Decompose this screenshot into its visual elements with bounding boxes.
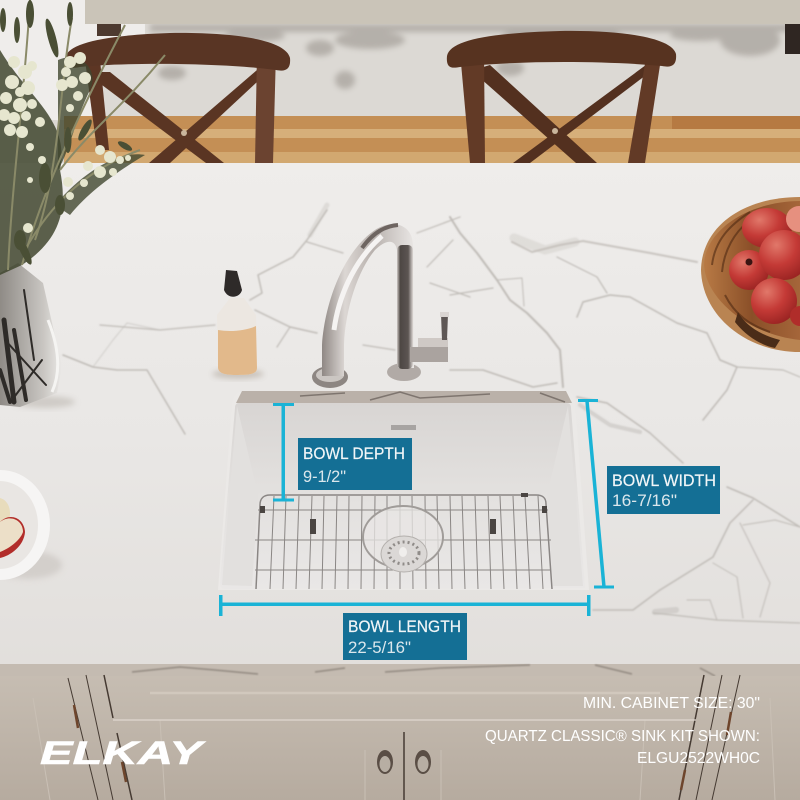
label: bowl depth — [298, 438, 412, 490]
plant flowers — [0, 52, 131, 233]
label: bowl length: BOWL LENGTH — [348, 617, 461, 636]
logo: Elkay: ELKAY — [40, 735, 206, 771]
dimension line: bowl width — [578, 400, 614, 587]
text: sink kit model — [485, 728, 760, 767]
dimension line: bowl length — [219, 595, 590, 616]
plant and glass vase — [0, 0, 165, 407]
icon: rack feet — [260, 493, 547, 534]
text: sink kit model: ELGU2522WH0C — [637, 750, 760, 767]
label: bowl depth: 9-1/2" — [303, 467, 346, 486]
chair: left — [65, 33, 290, 163]
plant stems — [8, 0, 165, 270]
label: bowl depth: BOWL DEPTH — [303, 444, 405, 463]
label: bowl width: BOWL WIDTH — [612, 471, 716, 490]
dimension line: bowl depth — [273, 403, 294, 502]
text: minimum cabinet size: MIN. CABINET SIZE: 30" — [583, 695, 760, 712]
icon: drain strainer — [363, 506, 443, 572]
soap dispenser — [212, 270, 264, 379]
vase shadow — [15, 396, 75, 408]
label: bowl length — [343, 613, 467, 660]
countertop — [0, 163, 800, 664]
label: bowl length: 22-5/16" — [348, 638, 411, 657]
fruit bowl with apples — [701, 197, 800, 352]
background: room, rug and floor — [0, 0, 800, 165]
text: sink kit model: QUARTZ CLASSIC® SINK KIT SHOWN: — [485, 728, 760, 745]
marble veins — [63, 205, 800, 623]
faucet — [312, 224, 449, 388]
basin interior — [220, 403, 585, 589]
icon: brand badge — [391, 425, 416, 430]
chair: right — [447, 31, 676, 163]
cabinets — [0, 675, 800, 800]
plant leaves — [0, 0, 133, 266]
glass vase — [0, 263, 62, 407]
plate with apple slices — [0, 470, 62, 580]
cabinet hinges — [74, 705, 731, 790]
sink rack — [255, 493, 552, 589]
plant foliage mass — [0, 50, 145, 275]
sink bowl — [218, 391, 589, 590]
label: bowl width: 16-7/16" — [612, 491, 677, 510]
icon: cabinet knobs — [377, 750, 431, 774]
countertop front edge — [0, 664, 800, 676]
label: bowl width — [607, 466, 720, 514]
apples — [729, 206, 800, 326]
